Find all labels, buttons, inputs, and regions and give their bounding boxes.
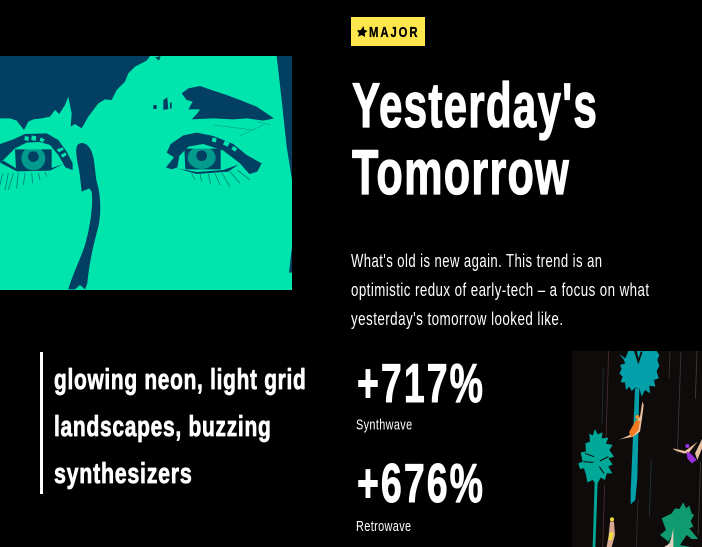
stat: Retrowave bbox=[356, 452, 485, 535]
diver: purple bbox=[673, 439, 702, 463]
neon streaks bbox=[602, 351, 701, 547]
right eye bbox=[166, 133, 262, 187]
right eyebrow bbox=[182, 86, 274, 121]
palm tree 1 bbox=[619, 351, 659, 504]
quote block: landscapes, buzzing bbox=[54, 411, 272, 443]
hair bbox=[0, 56, 150, 130]
palm tree 3 bbox=[660, 502, 698, 547]
body text: yesterday's tomorrow looked like. bbox=[351, 309, 564, 329]
body text bbox=[351, 251, 650, 329]
icon: star bbox=[357, 26, 368, 37]
stat: Retrowave: Retrowave bbox=[356, 518, 412, 535]
stat: Synthwave: +717% bbox=[357, 352, 485, 414]
figure: yellow bbox=[607, 517, 615, 547]
figure: white bbox=[664, 528, 673, 547]
badge: MAJOR: MAJOR bbox=[369, 25, 420, 41]
body text: What's old is new again. This trend is an bbox=[351, 251, 602, 271]
right edge shadow bbox=[277, 56, 292, 180]
diver: orange bbox=[617, 402, 644, 441]
title: Tomorrow bbox=[352, 138, 570, 208]
panel: duotone eyes photo bbox=[0, 56, 292, 290]
stat: Retrowave: +676% bbox=[357, 452, 485, 514]
nose shadow bbox=[68, 143, 100, 289]
quote block bbox=[40, 352, 306, 494]
quote block: synthesizers bbox=[54, 458, 192, 490]
badge: MAJOR bbox=[351, 17, 425, 46]
panel: palm tree and divers illustration bbox=[572, 351, 702, 547]
quote block: glowing neon, light grid bbox=[54, 364, 306, 396]
stat: Synthwave: Synthwave bbox=[356, 416, 412, 434]
palm tree 2 bbox=[578, 429, 614, 547]
left eye bbox=[0, 133, 73, 190]
title bbox=[352, 71, 598, 208]
stat: Synthwave bbox=[356, 352, 485, 434]
